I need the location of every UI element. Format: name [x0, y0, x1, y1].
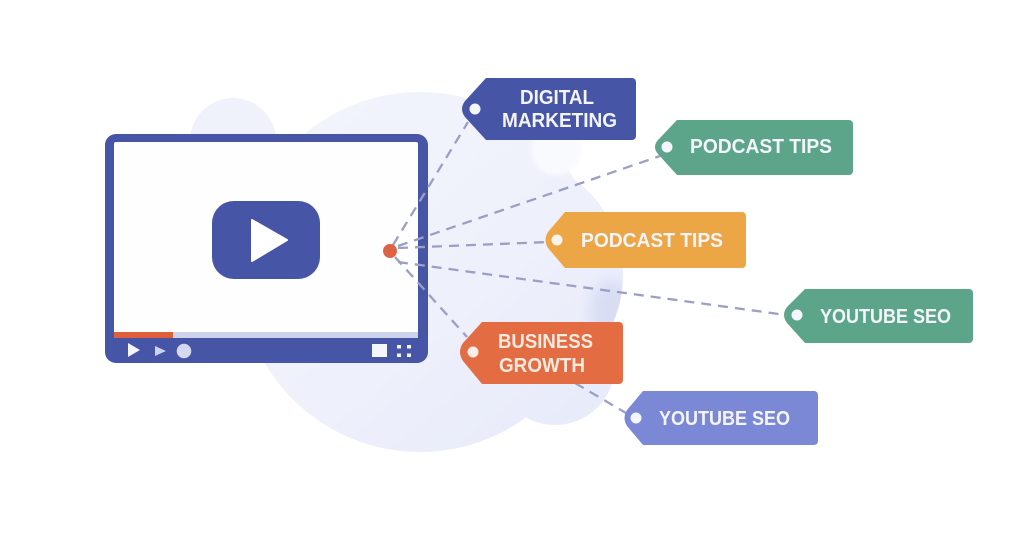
tag: youtube seo purple: YOUTUBE SEO: [659, 407, 790, 430]
tag: youtube seo green: [784, 289, 973, 343]
icon: central play button: [212, 201, 320, 279]
tag: business growth: GROWTH: [499, 354, 585, 377]
tag: youtube seo green: YOUTUBE SEO: [820, 305, 951, 328]
icon: window control: [372, 344, 387, 357]
background blobs: [190, 92, 634, 452]
icon: volume dot: [177, 344, 191, 358]
icon: next control: [155, 346, 166, 356]
progress track: [114, 332, 418, 338]
tag: digital marketing: DIGITAL: [520, 86, 594, 109]
tag: business growth: [460, 322, 623, 384]
tag: podcast tips orange: [546, 212, 746, 268]
player frame: [105, 134, 428, 363]
tag: business growth: BUSINESS: [498, 330, 593, 353]
tag: digital marketing: [462, 78, 636, 140]
hub dot: [383, 244, 397, 258]
tag: digital marketing: MARKETING: [502, 109, 617, 132]
player screen: [114, 142, 418, 338]
tag: podcast tips orange: PODCAST TIPS: [581, 229, 723, 252]
tag: podcast tips green: PODCAST TIPS: [690, 135, 832, 158]
video player: [105, 134, 428, 363]
tag: podcast tips green: [655, 120, 853, 175]
icon: play control: [128, 343, 140, 357]
icon: fullscreen control: [397, 345, 411, 357]
tag: youtube seo purple: [624, 391, 818, 445]
progress played: [114, 332, 173, 338]
dashed connector lines: [393, 122, 786, 413]
infographic: [105, 78, 973, 452]
